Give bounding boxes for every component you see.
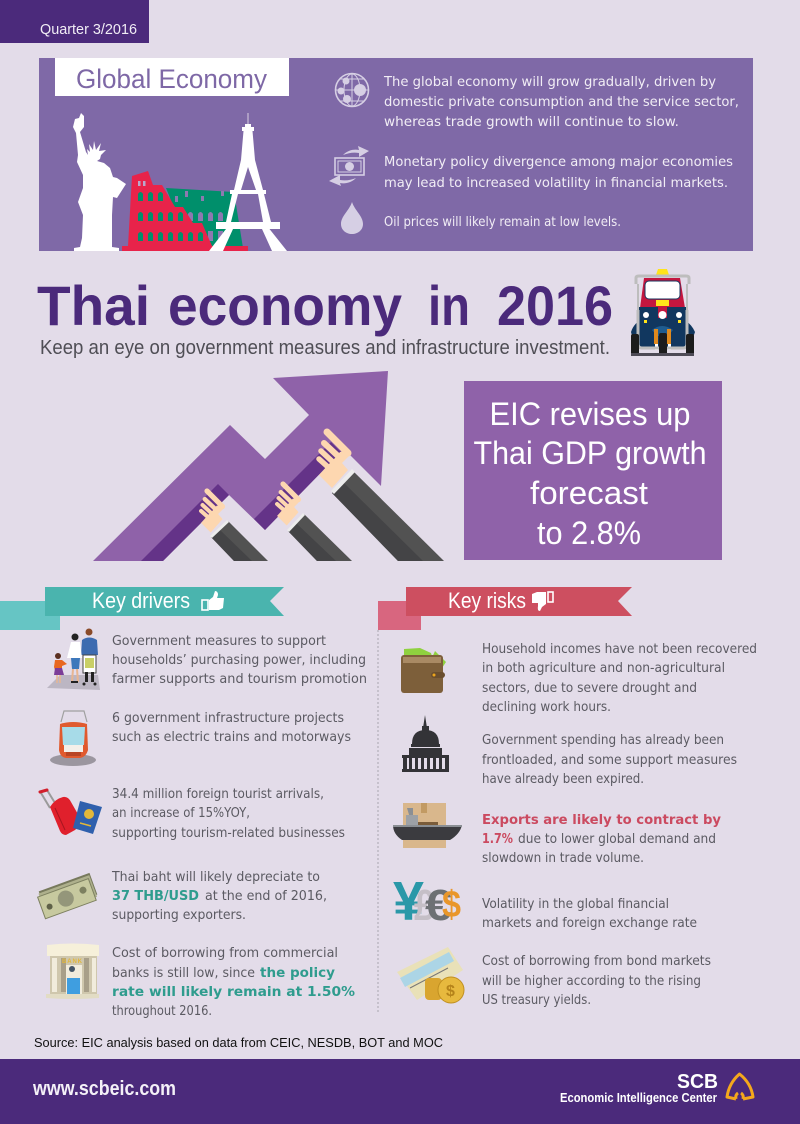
text: risks list: markets and foreign exchange rate bbox=[482, 916, 697, 931]
text: drivers list: farmer supports and tourism promotion bbox=[112, 672, 367, 687]
icon: currency symbols: £ bbox=[414, 881, 434, 930]
text: risks list: Volatility in the global financial bbox=[482, 897, 669, 912]
text: drivers list: supporting exporters. bbox=[112, 908, 246, 923]
quarter tab bbox=[0, 0, 149, 43]
heading: key drivers bbox=[0, 587, 284, 630]
quarter tab: Quarter 3/2016 bbox=[40, 22, 137, 38]
text: drivers list: at the end of 2016, bbox=[205, 889, 327, 904]
footer bbox=[0, 1059, 800, 1124]
text: risks list: frontloaded, and some support measures bbox=[482, 753, 737, 768]
text: risks list: US treasury yields. bbox=[482, 993, 591, 1008]
icon: red suitcase and passport bbox=[40, 790, 102, 835]
text: risks list bbox=[482, 642, 757, 1008]
text: drivers list: Government measures to support bbox=[112, 634, 326, 649]
text: drivers list: supporting tourism-related businesses bbox=[112, 826, 345, 841]
panel: global economy bbox=[39, 58, 753, 251]
icon: tuk-tuk bbox=[631, 269, 695, 356]
text: risks list: will be higher according to the rising bbox=[482, 974, 701, 989]
icon: family with shopping cart bbox=[47, 628, 100, 690]
text: drivers list: throughout 2016. bbox=[112, 1004, 212, 1019]
text: risks list: Government spending has already been bbox=[482, 733, 724, 748]
callout: GDP forecast bbox=[464, 381, 722, 560]
text: risks list: 1.7% bbox=[482, 832, 513, 847]
text: drivers list bbox=[111, 634, 367, 1019]
icon: electric train bbox=[50, 711, 96, 766]
illustration: colosseum front bbox=[122, 171, 248, 251]
icon: bank building: BANK bbox=[62, 959, 83, 965]
text: drivers list: Thai baht will likely depreciate to bbox=[111, 870, 320, 885]
heading: key risks: Key risks bbox=[448, 588, 526, 613]
arm: right bbox=[319, 432, 444, 561]
callout: GDP forecast: Thai GDP growth bbox=[474, 435, 706, 471]
arm: middle bbox=[277, 484, 352, 561]
arm: left bbox=[201, 491, 268, 561]
heading: global economy: Global Economy bbox=[76, 64, 267, 94]
text: drivers list: Cost of borrowing from commercial bbox=[112, 946, 338, 961]
chart: rising arrow lifted by hands bbox=[93, 371, 444, 561]
icon: bank building bbox=[46, 944, 99, 999]
text: global economy points: The global economy will grow gradually, driven by bbox=[383, 75, 716, 90]
icon: currency symbols: $ bbox=[442, 884, 461, 926]
icon: thumbs up bbox=[202, 591, 224, 610]
icon: capitol building bbox=[402, 715, 449, 772]
icon: currency symbols: ¥ bbox=[393, 870, 424, 932]
source note: Source: EIC analysis based on data from CEIC, NESDB, BOT and MOC bbox=[34, 1035, 443, 1050]
title: 2016 bbox=[497, 274, 613, 337]
callout: GDP forecast: forecast bbox=[530, 475, 648, 511]
text: drivers list: 6 government infrastructure projects bbox=[112, 711, 344, 726]
callout: GDP forecast: to 2.8% bbox=[537, 515, 641, 551]
icon: cheque and gold coins bbox=[397, 947, 464, 1003]
icon: globe with currencies bbox=[336, 74, 368, 106]
text: drivers list: households’ purchasing power, including bbox=[112, 653, 366, 668]
text: risks list: have already been expired. bbox=[482, 772, 644, 787]
footer: Economic Intelligence Center bbox=[560, 1090, 717, 1105]
icon: wallet bbox=[401, 648, 446, 693]
text: risks list: Household incomes have not been recovered bbox=[482, 642, 757, 657]
title bbox=[37, 274, 613, 337]
heading: global economy bbox=[55, 58, 289, 96]
text: risks list: Cost of borrowing from bond markets bbox=[482, 954, 711, 969]
icon: currency symbols bbox=[393, 870, 461, 932]
text: drivers list: 34.4 million foreign tourist arrivals, bbox=[112, 787, 324, 802]
text: global economy points: whereas trade growth will continue to slow. bbox=[384, 115, 679, 130]
text: drivers list: the policy bbox=[260, 966, 335, 981]
icon: money exchange bbox=[329, 146, 369, 186]
icon: thumbs down bbox=[532, 592, 553, 611]
text: global economy points: domestic private consumption and the service sector, bbox=[384, 95, 739, 110]
text: risks list: in both agriculture and non-agricultural bbox=[482, 661, 725, 676]
arrow bbox=[93, 371, 388, 561]
text: drivers list: rate will likely remain at 1.50% bbox=[112, 985, 355, 1000]
text: global economy points: Oil prices will likely remain at low levels. bbox=[384, 215, 621, 230]
icon: cheque and gold coins: $ bbox=[446, 983, 455, 1000]
text: global economy points bbox=[383, 75, 739, 230]
text: drivers list: such as electric trains and motorways bbox=[112, 730, 351, 745]
illustration: statue of liberty bbox=[73, 113, 126, 251]
icon: currency symbols: € bbox=[425, 881, 452, 930]
text: global economy points: may lead to increased volatility in financial markets. bbox=[384, 176, 728, 191]
text: drivers list: 37 THB/USD bbox=[112, 889, 199, 904]
illustration: colosseum back bbox=[166, 188, 243, 248]
title: Thai bbox=[37, 274, 150, 337]
icon: cargo ship bbox=[393, 803, 462, 848]
title: economy bbox=[168, 274, 402, 337]
icon: stack of banknotes bbox=[36, 873, 99, 919]
text: drivers list: an increase of 15%YOY, bbox=[112, 806, 250, 821]
text: drivers list: banks is still low, since bbox=[112, 966, 255, 981]
footer: SCB bbox=[677, 1071, 718, 1093]
divider bbox=[377, 630, 379, 1012]
illustration: eiffel tower bbox=[209, 113, 287, 251]
footer: www.scbeic.com bbox=[32, 1078, 176, 1100]
text: risks list: sectors, due to severe drought and bbox=[482, 681, 697, 696]
text: risks list: declining work hours. bbox=[482, 700, 611, 715]
text: risks list: due to lower global demand and bbox=[518, 832, 716, 847]
subtitle: Keep an eye on government measures and infrastructure investment. bbox=[40, 337, 610, 359]
callout: GDP forecast: EIC revises up bbox=[490, 396, 690, 432]
icon: SCB logo bbox=[727, 1074, 753, 1099]
heading: key drivers: Key drivers bbox=[92, 588, 190, 613]
icon: oil drop bbox=[341, 202, 363, 234]
text: global economy points: Monetary policy divergence among major economies bbox=[384, 155, 733, 170]
heading: key risks bbox=[378, 587, 632, 630]
text: risks list: Exports are likely to contract by bbox=[482, 813, 721, 828]
text: risks list: slowdown in trade volume. bbox=[482, 851, 644, 866]
title: in bbox=[428, 274, 470, 337]
